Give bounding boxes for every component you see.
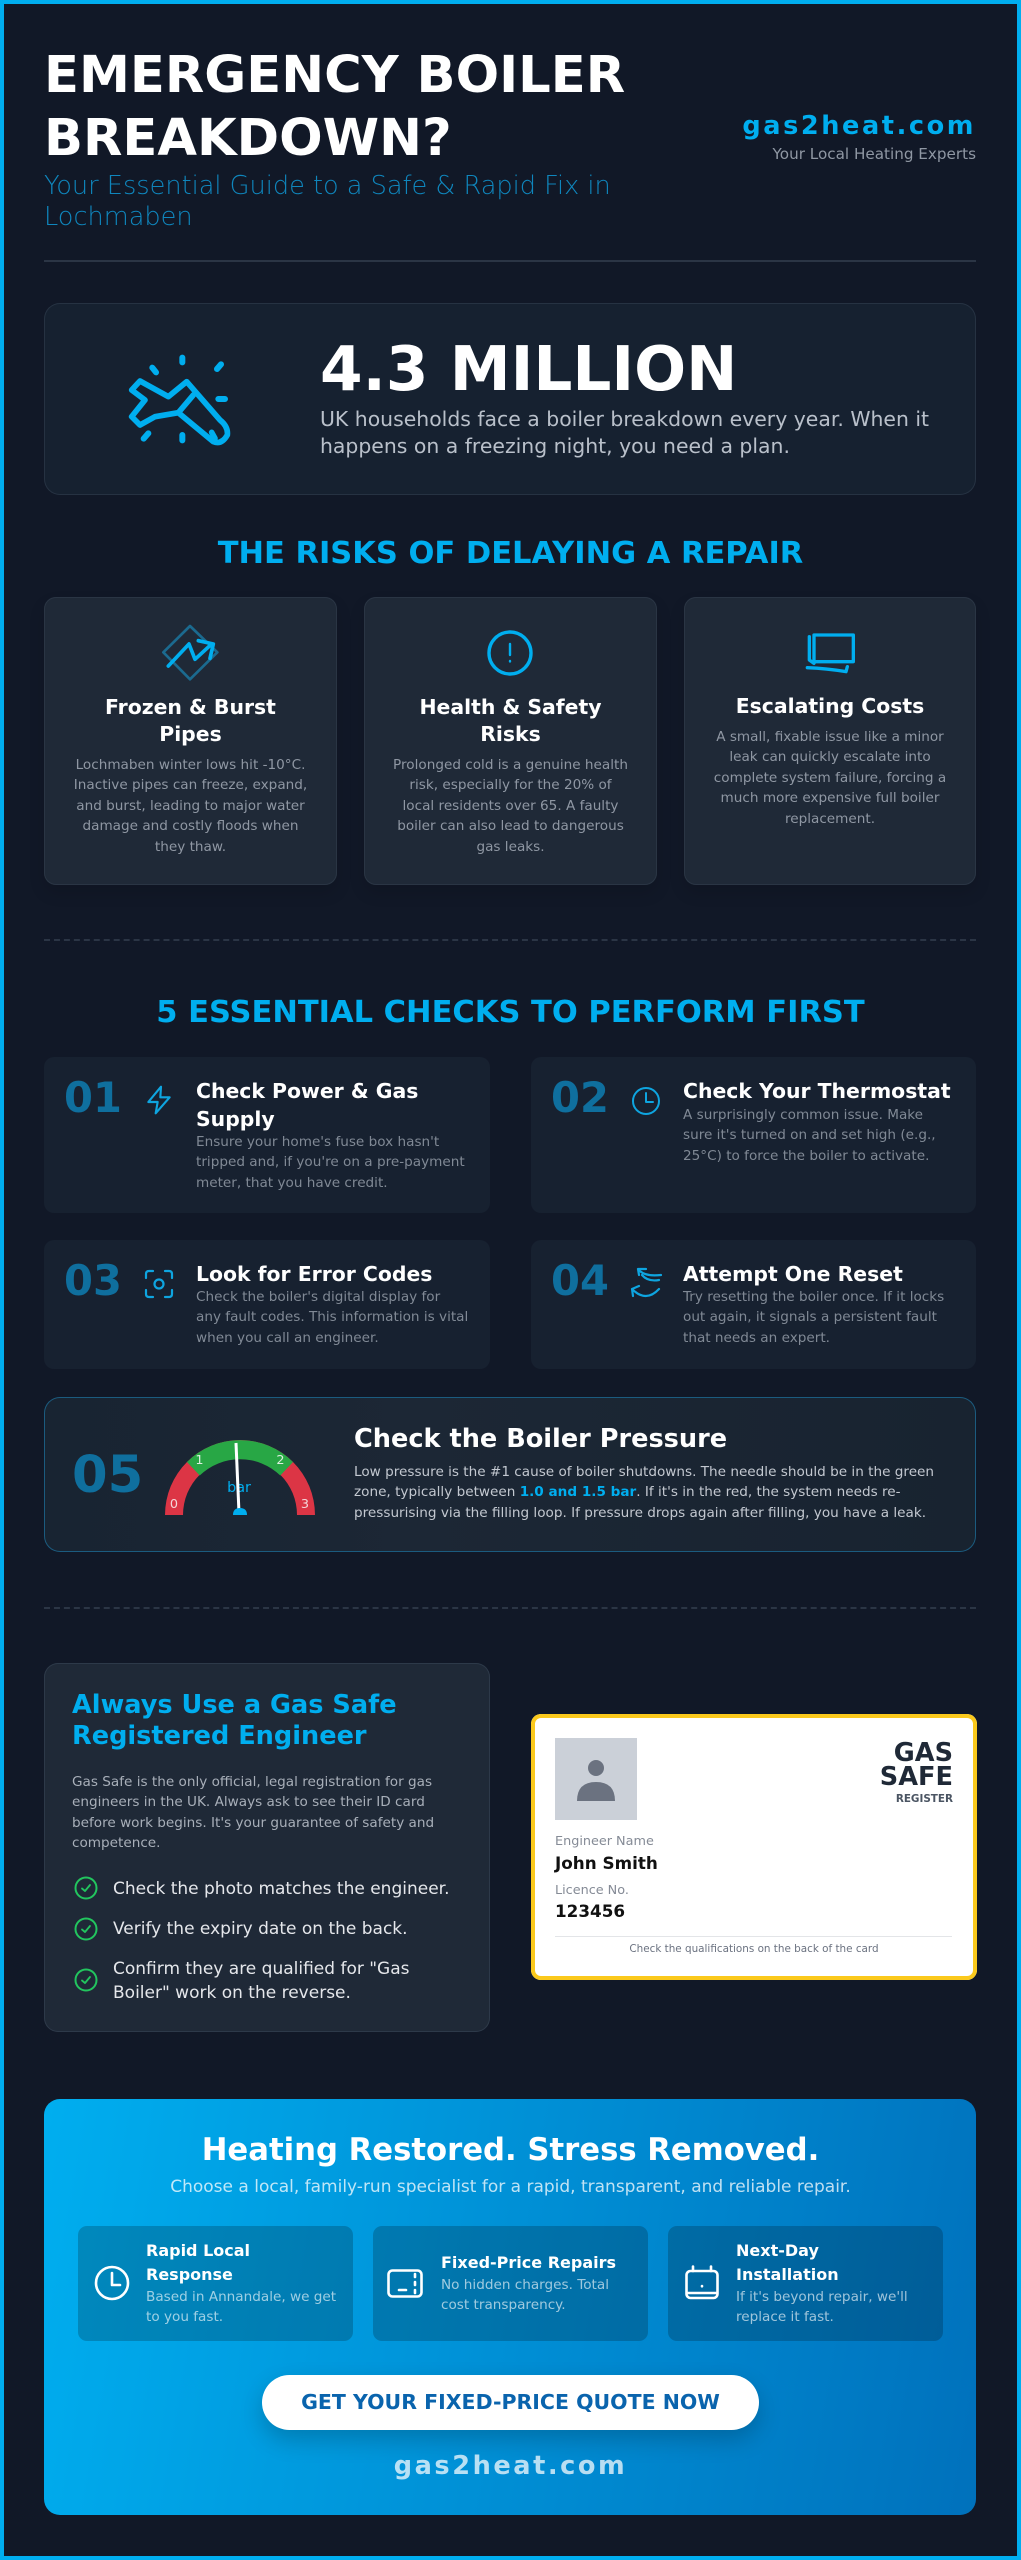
- step text: meter, that you have credit.: [196, 1175, 388, 1191]
- subtitle: Your Essential Guide to a Safe & Rapid Fix in: [44, 171, 611, 201]
- step text: A surprisingly common issue. Make: [683, 1107, 923, 1123]
- benefit description: No hidden charges. Total: [441, 2277, 609, 2293]
- gas safe id card: [531, 1714, 977, 1980]
- stat number: 4.3 MILLION: [320, 334, 737, 405]
- step text: when you call an engineer.: [196, 1330, 379, 1346]
- step title: Look for Error Codes: [196, 1262, 432, 1286]
- step title: [196, 1079, 418, 1131]
- card rule: [555, 1936, 952, 1937]
- step text: 25°C) to force the boiler to activate.: [683, 1148, 929, 1164]
- panel: check 02: [531, 1057, 976, 1213]
- gauge: 3: [301, 1497, 309, 1512]
- step text: [683, 1107, 936, 1164]
- gas safe logo: [880, 1738, 953, 1792]
- stat description: [320, 407, 929, 458]
- intro text: before work begins. It's your guarantee of safety and: [72, 1815, 434, 1831]
- risk text: local residents over 65. A faulty: [403, 798, 618, 814]
- benefit: rapid local response: [78, 2226, 353, 2341]
- intro text: Gas Safe is the only official, legal registration for gas: [72, 1774, 432, 1790]
- step number: 02: [551, 1073, 609, 1122]
- panel: escalating costs: [684, 597, 976, 885]
- icon: clock: [94, 2266, 130, 2300]
- risk text: they thaw.: [155, 839, 226, 855]
- cta subheading: Choose a local, family-run specialist for a rapid, transparent, and reliable repair.: [170, 2177, 851, 2197]
- icon: lightning bolt: [147, 1086, 171, 1114]
- stat description: UK households face a boiler breakdown every year. When it: [320, 407, 929, 431]
- risk text: [74, 757, 307, 855]
- risk text: [714, 729, 946, 827]
- icon: scan focus: [144, 1270, 174, 1298]
- title: BREAKDOWN?: [44, 108, 452, 168]
- benefit text: [736, 2239, 936, 2329]
- step text: [196, 1289, 468, 1346]
- item 3: Confirm they are qualified for "Gas: [113, 1959, 410, 1979]
- heading: Registered Engineer: [72, 1721, 367, 1751]
- step text: [682, 1289, 944, 1346]
- panel: check 04: [531, 1240, 976, 1369]
- risk text: Lochmaben winter lows hit -10°C.: [76, 757, 305, 773]
- icon: clock: [632, 1087, 660, 1115]
- benefit: next day installation: [668, 2226, 943, 2341]
- step text: zone, typically between 1.0 and 1.5 bar. If it's in the red, the system needs re-: [354, 1484, 901, 1500]
- step text: [354, 1464, 934, 1521]
- benefit title: Response: [146, 2265, 233, 2284]
- risk title: [419, 695, 602, 746]
- intro text: engineers in the UK. Always ask to see their ID card: [72, 1794, 425, 1810]
- gauge: 2: [276, 1453, 285, 1468]
- benefit text: [441, 2253, 616, 2313]
- engineer name: John Smith: [555, 1853, 658, 1873]
- risk title: Risks: [480, 722, 541, 746]
- heading: checks: 5 ESSENTIAL CHECKS TO PERFORM FIRST: [156, 995, 865, 1030]
- risk text: risk, especially for the 20% of: [409, 777, 612, 793]
- checklist: [74, 1876, 450, 2003]
- cta button: GET YOUR FIXED-PRICE QUOTE NOW: [301, 2390, 720, 2414]
- gauge: bar: [227, 1480, 251, 1496]
- risk text: [393, 757, 628, 855]
- panel: gas safe advice: [44, 1663, 490, 2032]
- icon: check 1: [74, 1876, 98, 1900]
- risk title: Pipes: [159, 722, 222, 746]
- photo placeholder: [555, 1738, 637, 1820]
- gauge: 1: [195, 1453, 204, 1468]
- step text: sure it's turned on and set high (e.g.,: [683, 1127, 936, 1143]
- benefit description: [736, 2287, 908, 2328]
- icon: burst pipe chart: [162, 624, 219, 681]
- icon: person: [577, 1760, 615, 1801]
- risk title: Frozen & Burst: [105, 695, 276, 719]
- benefit: fixed price repairs: [373, 2226, 648, 2341]
- item 3: Boiler" work on the reverse.: [113, 1983, 351, 2003]
- gas safe logo: GAS: [894, 1738, 953, 1768]
- step text: any fault codes. This information is vital: [196, 1309, 468, 1325]
- title: [44, 45, 625, 168]
- benefit title: Next-Day: [736, 2241, 819, 2260]
- item 2: Verify the expiry date on the back.: [113, 1919, 408, 1939]
- benefit title: [736, 2239, 839, 2287]
- panel: check 01: [44, 1057, 490, 1213]
- register label: REGISTER: [896, 1793, 953, 1805]
- panel: health and safety risks: [364, 597, 657, 885]
- step text: Check the boiler's digital display for: [196, 1289, 440, 1305]
- step title: Check Your Thermostat: [683, 1079, 951, 1103]
- icon: calendar: [685, 2265, 719, 2301]
- icon: wallet: [387, 2269, 423, 2298]
- licence label: Licence No.: [555, 1883, 629, 1898]
- risk text: replacement.: [785, 811, 875, 827]
- benefit text: [146, 2241, 336, 2325]
- step text: Low pressure is the #1 cause of boiler shutdowns. The needle should be in the green: [354, 1464, 934, 1480]
- call to action panel: [44, 2099, 976, 2515]
- benefit description: [146, 2289, 336, 2325]
- footer brand: gas2heat.com: [394, 2451, 627, 2481]
- step number: 01: [64, 1073, 122, 1122]
- panel: frozen and burst pipes: [44, 597, 337, 885]
- step text: that needs an expert.: [683, 1330, 830, 1346]
- licence number: 123456: [555, 1901, 625, 1921]
- risk text: A small, fixable issue like a minor: [716, 729, 944, 745]
- step text: Try resetting the boiler once. If it locks: [683, 1289, 944, 1305]
- risk text: leak can quickly escalate into: [729, 749, 931, 765]
- intro text: [72, 1774, 434, 1851]
- engineer name label: Engineer Name: [555, 1834, 654, 1849]
- intro text: competence.: [72, 1835, 160, 1851]
- subtitle: Lochmaben: [44, 202, 193, 232]
- heading: [72, 1690, 397, 1751]
- step text: out again, it signals a persistent fault: [683, 1309, 937, 1325]
- icon: check 3: [74, 1968, 98, 1992]
- icon: reset arrows: [630, 1268, 662, 1298]
- heading: Always Use a Gas Safe: [72, 1690, 397, 1720]
- subtitle: [44, 171, 611, 232]
- icon: check 2: [74, 1918, 98, 1940]
- step text: tripped and, if you're on a pre-payment: [196, 1154, 465, 1170]
- step text: [196, 1134, 465, 1191]
- gauge: 0: [170, 1497, 178, 1512]
- brand tagline: Your Local Heating Experts: [773, 145, 976, 163]
- step number: 04: [551, 1256, 609, 1305]
- step title: Attempt One Reset: [683, 1262, 903, 1286]
- header rule: [44, 260, 976, 262]
- risk title: Health & Safety: [419, 695, 602, 719]
- risk text: and burst, leading to major water: [76, 798, 305, 814]
- panel: check 05 boiler pressure: [44, 1397, 976, 1552]
- heading: risks: THE RISKS OF DELAYING A REPAIR: [218, 536, 803, 571]
- risk text: boiler can also lead to dangerous: [397, 818, 624, 834]
- risk text: gas leaks.: [476, 839, 545, 855]
- benefit description: cost transparency.: [441, 2297, 566, 2313]
- step number: 03: [64, 1256, 122, 1305]
- step text: pressurising via the filling loop. If pressure drops again after filling, you have a leak.: [354, 1505, 926, 1521]
- step title: Check the Boiler Pressure: [354, 1424, 727, 1454]
- cta button: [262, 2375, 759, 2430]
- benefit title: Rapid Local: [146, 2241, 250, 2260]
- title: EMERGENCY BOILER: [44, 45, 625, 105]
- panel: check 03: [44, 1240, 490, 1369]
- gas safe logo: SAFE: [880, 1762, 953, 1792]
- stat panel: [44, 303, 976, 495]
- step title: Supply: [196, 1107, 275, 1131]
- benefit title: [146, 2241, 250, 2284]
- brand name: gas2heat.com: [742, 111, 976, 141]
- step text: Ensure your home's fuse box hasn't: [196, 1134, 439, 1150]
- step number: 05: [72, 1445, 143, 1505]
- card footnote: Check the qualifications on the back of the card: [629, 1943, 879, 1955]
- icon: broken pipe: [128, 354, 230, 446]
- item 1: Check the photo matches the engineer.: [113, 1879, 450, 1899]
- benefit description: If it's beyond repair, we'll: [736, 2289, 908, 2305]
- header: [44, 45, 976, 262]
- risk text: Inactive pipes can freeze, expand,: [74, 777, 307, 793]
- stat description: happens on a freezing night, you need a plan.: [320, 434, 790, 458]
- step title: Check Power & Gas: [196, 1079, 418, 1103]
- risk text: complete system failure, forcing a: [714, 770, 946, 786]
- gauge: [165, 1440, 315, 1515]
- benefit description: to you fast.: [146, 2309, 223, 2325]
- item 3: [113, 1959, 410, 2003]
- icon: warning circle: [487, 630, 533, 676]
- risk text: Prolonged cold is a genuine health: [393, 757, 628, 773]
- risk title: Escalating Costs: [736, 694, 924, 718]
- risk title: [105, 695, 276, 746]
- risk text: much more expensive full boiler: [721, 790, 939, 806]
- benefit description: [441, 2277, 609, 2313]
- benefit title: Fixed-Price Repairs: [441, 2253, 616, 2272]
- icon: stacked notes: [806, 633, 855, 674]
- risk text: damage and costly floods when: [82, 818, 299, 834]
- benefit title: Installation: [736, 2265, 839, 2284]
- cta heading: Heating Restored. Stress Removed.: [202, 2133, 819, 2168]
- benefit description: replace it fast.: [736, 2309, 834, 2325]
- benefit description: Based in Annandale, we get: [146, 2289, 336, 2305]
